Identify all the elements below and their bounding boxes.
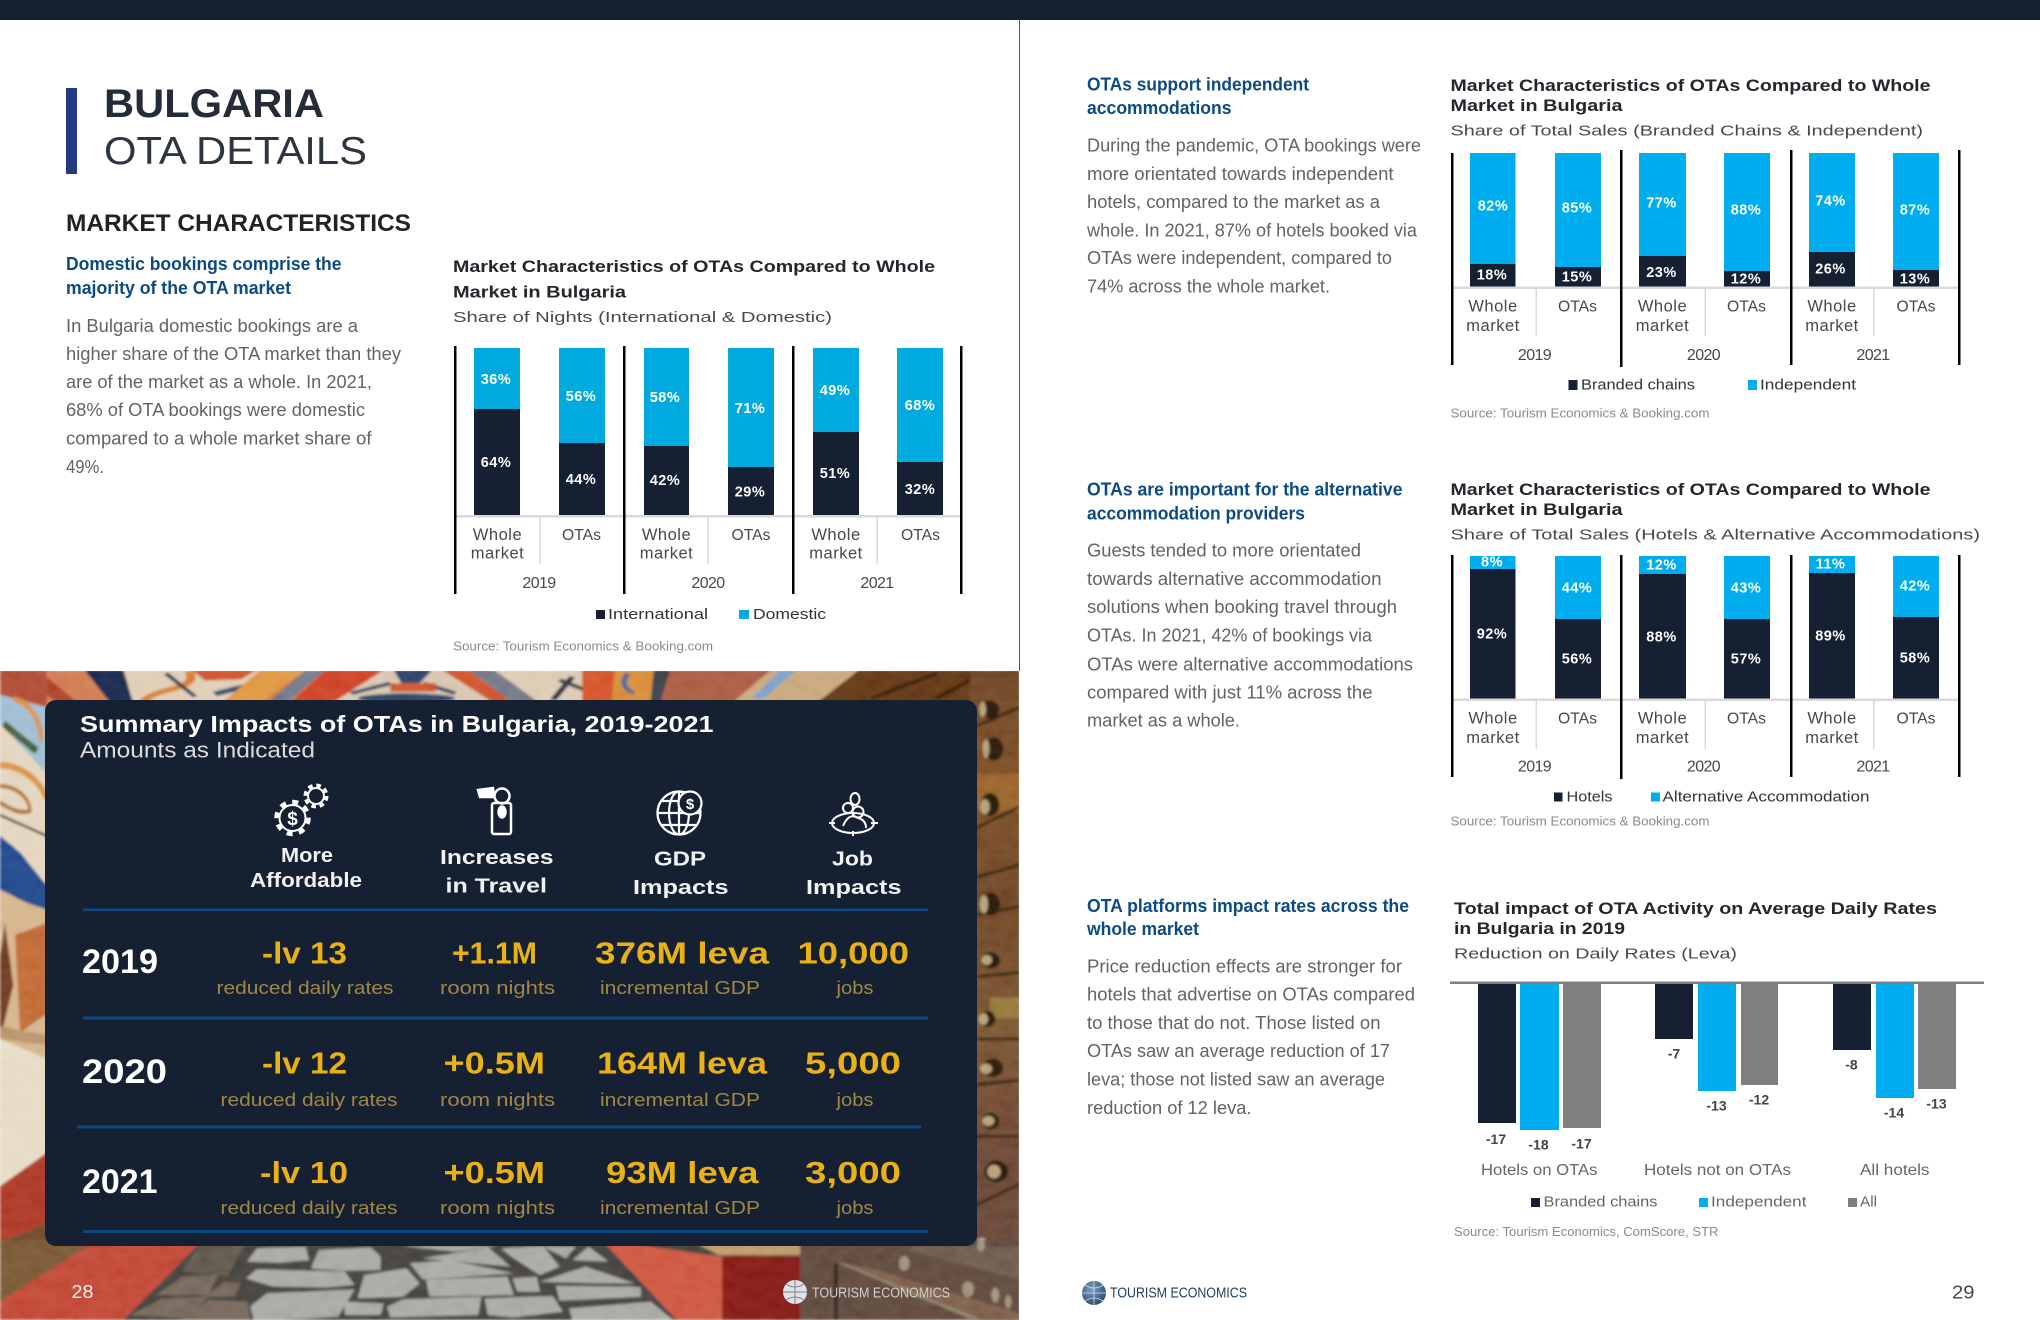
row 2019: reduced daily rates — [216, 978, 394, 998]
value labels: 42% — [650, 473, 680, 489]
row 2021: reduced daily rates — [220, 1198, 398, 1218]
category labels: market — [809, 544, 863, 562]
category labels: 2021 — [1856, 347, 1890, 364]
panel heading — [80, 711, 714, 762]
text block: alternative accommodation: OTAs are important for the alternative — [1087, 480, 1402, 500]
fresco left strip — [0, 670, 47, 1320]
category labels: Whole — [1807, 710, 1857, 728]
value labels: -12 — [1749, 1092, 1769, 1108]
row 2020: room nights — [440, 1090, 555, 1110]
row 2020: +0.5M — [444, 1046, 545, 1080]
panel heading: Summary Impacts of OTAs in Bulgaria, 2019-2021 — [80, 711, 714, 737]
column headings: Job — [832, 848, 873, 870]
chart heading: Market in Bulgaria — [1450, 500, 1623, 519]
column headings: Impacts — [633, 877, 728, 899]
category labels: 2019 — [1518, 347, 1552, 364]
value labels — [1477, 194, 1930, 288]
title: BULGARIA — [104, 82, 324, 126]
legend: Alternative Accommodation — [1662, 788, 1870, 806]
category labels: Whole — [473, 526, 522, 544]
category labels: market — [471, 544, 524, 562]
source note: Source: Tourism Economics & Booking.com — [1450, 814, 1710, 828]
legend: Hotels — [1566, 788, 1612, 806]
value labels: 23% — [1646, 265, 1677, 281]
category labels: market — [1466, 729, 1520, 747]
value labels: 88% — [1731, 202, 1761, 218]
value labels: 26% — [1815, 262, 1846, 278]
legend — [1568, 376, 1857, 394]
value labels: 36% — [481, 372, 511, 388]
chart heading — [453, 257, 935, 326]
value labels: -17 — [1571, 1136, 1592, 1152]
category labels: OTAs — [1897, 298, 1936, 316]
text block: platforms impact rates: leva; those not listed saw an average — [1087, 1070, 1385, 1090]
category labels: OTAs — [1897, 710, 1936, 728]
category labels: Whole — [1807, 298, 1857, 316]
text block: independent accommodations: more orientated towards independent — [1087, 164, 1394, 184]
icon: globe with coin: $ — [686, 796, 695, 813]
text block: independent accommodations: OTAs support independent — [1087, 74, 1309, 94]
text block: alternative accommodation: towards alternative accommodation — [1087, 569, 1382, 589]
value labels: -14 — [1884, 1104, 1904, 1120]
row 2019: room nights — [440, 978, 555, 998]
chart heading: Market Characteristics of OTAs Compared to Whole — [453, 257, 935, 276]
zero axis — [1450, 982, 1984, 984]
column headings: GDP — [654, 848, 706, 870]
row 2019: 10,000 — [798, 936, 909, 970]
axis and year dividers — [1451, 555, 1960, 779]
value labels: 44% — [566, 472, 596, 488]
value labels — [1486, 1046, 1947, 1152]
value labels: -13 — [1926, 1096, 1947, 1112]
category labels: OTAs — [901, 527, 940, 544]
accent bar — [66, 88, 77, 174]
category labels: 2020 — [1687, 758, 1721, 776]
category labels: All hotels — [1860, 1162, 1930, 1179]
axis and year dividers — [1451, 150, 1960, 367]
text block: domestic bookings: higher share of the OTA market than they — [66, 344, 401, 364]
category labels — [1481, 1162, 1930, 1179]
category labels: market — [1805, 317, 1859, 335]
value labels: 57% — [1731, 652, 1761, 668]
text block: domestic bookings: 68% of OTA bookings were domestic — [66, 400, 365, 420]
row 2020: 5,000 — [805, 1046, 901, 1080]
category labels: market — [1805, 729, 1859, 747]
row 2021: -lv 10 — [260, 1155, 348, 1190]
row 2021: room nights — [440, 1198, 555, 1218]
category labels: market — [1636, 317, 1689, 335]
row 2019 — [82, 936, 909, 998]
section heading: MARKET CHARACTERISTICS — [66, 210, 411, 237]
value labels: 18% — [1477, 268, 1507, 284]
row 2020: -lv 12 — [262, 1046, 347, 1080]
text block: platforms impact rates — [1086, 896, 1415, 1118]
category labels: market — [1466, 317, 1520, 335]
row 2019: +1.1M — [452, 936, 537, 970]
text block: independent accommodations — [1086, 74, 1421, 296]
value labels: -8 — [1845, 1056, 1858, 1072]
chart heading: Market in Bulgaria — [453, 282, 627, 302]
row 2019: incremental GDP — [600, 978, 760, 998]
category labels: 2021 — [860, 575, 894, 592]
category labels: OTAs — [562, 527, 601, 544]
value labels: 58% — [1900, 650, 1930, 666]
row 2020: incremental GDP — [600, 1090, 760, 1110]
page divider — [1019, 20, 1020, 671]
chart heading — [1454, 899, 1937, 962]
value labels: 49% — [820, 383, 850, 399]
text block: platforms impact rates: OTAs saw an average reduction of 17 — [1087, 1041, 1390, 1061]
stacked bars — [1470, 153, 1939, 287]
category labels: 2021 — [1856, 758, 1890, 776]
row 2020: 2020 — [82, 1053, 167, 1091]
source note: Source: Tourism Economics, ComScore, STR — [1454, 1225, 1718, 1239]
icon: globe with coin — [658, 791, 702, 835]
legend — [596, 606, 827, 623]
category labels: 2020 — [691, 575, 725, 592]
value labels: 77% — [1646, 196, 1677, 212]
icon: gears with dollar — [276, 786, 326, 834]
text block: domestic bookings: compared to a whole market share of — [66, 428, 373, 448]
title — [104, 82, 367, 173]
legend: Independent — [1760, 376, 1857, 394]
row rules — [77, 908, 928, 1233]
value labels: 29% — [735, 484, 765, 500]
row 2021: 3,000 — [805, 1155, 901, 1190]
category labels: OTAs — [1727, 298, 1766, 316]
value labels: 58% — [650, 390, 680, 406]
category labels — [471, 526, 940, 592]
category labels: Hotels not on OTAs — [1644, 1162, 1791, 1179]
chart heading: in Bulgaria in 2019 — [1454, 919, 1625, 938]
column headings — [250, 845, 902, 899]
row 2019: -lv 13 — [262, 936, 347, 970]
text block: platforms impact rates: hotels that advertise on OTAs compared — [1087, 984, 1415, 1004]
icon: gears with dollar: $ — [287, 809, 298, 830]
floor, red walls and door — [0, 1239, 1020, 1320]
text block: independent accommodations: 74% across the whole market. — [1087, 276, 1330, 296]
chart heading — [1450, 480, 1980, 544]
legend: Domestic — [753, 606, 827, 623]
text block: independent accommodations: OTAs were independent, compared to — [1087, 248, 1392, 268]
text block: domestic bookings: In Bulgaria domestic bookings are a — [66, 316, 359, 336]
value labels: 82% — [1478, 198, 1508, 214]
legend: Branded chains — [1581, 376, 1695, 394]
text block: domestic bookings: majority of the OTA market — [66, 278, 291, 298]
category labels: Whole — [1638, 298, 1687, 316]
text block: domestic bookings — [66, 254, 401, 477]
value labels: 56% — [566, 389, 596, 405]
category labels: OTAs — [1558, 298, 1597, 316]
bars — [1478, 983, 1956, 1130]
column headings: More — [281, 845, 333, 867]
row 2021: jobs — [835, 1198, 874, 1218]
value labels: 85% — [1562, 200, 1592, 216]
value labels: -13 — [1706, 1098, 1727, 1114]
value labels: 71% — [735, 401, 765, 417]
value labels: 8% — [1481, 554, 1503, 570]
row 2021: 2021 — [82, 1163, 158, 1201]
value labels: 51% — [820, 466, 850, 482]
value labels: 12% — [1731, 272, 1761, 288]
chart: share of nights — [453, 257, 962, 654]
chart heading: Market Characteristics of OTAs Compared to Whole — [1450, 76, 1930, 95]
row 2019: 376M leva — [595, 936, 770, 970]
row 2020: jobs — [835, 1090, 874, 1110]
text block: independent accommodations: During the pandemic, OTA bookings were — [1087, 136, 1421, 156]
category labels: 2019 — [1518, 758, 1552, 776]
panel: summary impacts — [45, 700, 977, 1246]
chart: reduction on daily rates — [1450, 899, 1984, 1239]
text block: alternative accommodation: accommodation providers — [1087, 504, 1305, 524]
fresco ceiling strip — [45, 671, 972, 707]
text block: independent accommodations: whole. In 2021, 87% of hotels booked via — [1086, 220, 1418, 240]
category labels: OTAs — [1727, 710, 1766, 728]
chart heading: Share of Nights (International & Domestic) — [453, 309, 832, 326]
value labels: 32% — [905, 482, 935, 498]
category labels: OTAs — [732, 527, 771, 544]
text block: platforms impact rates: whole market — [1086, 919, 1199, 939]
text block: domestic bookings: Domestic bookings comprise the — [66, 254, 342, 274]
category labels: 2020 — [1687, 347, 1721, 364]
text block: alternative accommodation: solutions when booking travel through — [1087, 597, 1397, 617]
source note: Source: Tourism Economics & Booking.com — [453, 640, 713, 654]
value labels — [1477, 554, 1930, 668]
category labels: Hotels on OTAs — [1481, 1162, 1598, 1179]
value labels: 88% — [1646, 630, 1677, 646]
chart: branded chains vs independent — [1450, 76, 1960, 420]
row 2020: 164M leva — [597, 1046, 768, 1080]
row 2020: reduced daily rates — [220, 1090, 398, 1110]
category labels: Whole — [1638, 710, 1687, 728]
text block: platforms impact rates: to those that do not. Those listed on — [1087, 1013, 1380, 1033]
column headings: in Travel — [446, 876, 547, 898]
value labels: -18 — [1528, 1136, 1549, 1152]
row 2021 — [82, 1155, 901, 1218]
legend: International — [608, 606, 708, 623]
top header bar — [0, 0, 2040, 20]
text block: independent accommodations: hotels, compared to the market as a — [1087, 192, 1381, 212]
category labels: Whole — [1468, 298, 1518, 316]
row 2021: +0.5M — [444, 1155, 545, 1190]
stacked bars — [474, 348, 943, 515]
text block: alternative accommodation: OTAs were alternative accommodations — [1087, 654, 1413, 674]
panel heading: Amounts as Indicated — [80, 738, 315, 762]
title: OTA DETAILS — [104, 130, 367, 173]
chart heading: Reduction on Daily Rates (Leva) — [1454, 946, 1737, 962]
background photo: monastery fresco and stone floor — [0, 670, 1020, 1320]
category labels: 2019 — [522, 575, 556, 592]
column headings: Affordable — [250, 870, 362, 892]
chart heading: Share of Total Sales (Hotels & Alternative Accommodations) — [1450, 526, 1980, 544]
value labels: 64% — [481, 455, 511, 471]
category labels — [1466, 298, 1936, 364]
value labels: 92% — [1477, 626, 1507, 642]
value labels: 89% — [1815, 628, 1846, 644]
value labels: 15% — [1562, 270, 1592, 286]
value labels: 42% — [1900, 578, 1930, 594]
text block: platforms impact rates: Price reduction effects are stronger for — [1087, 956, 1402, 976]
page number 28: 28 — [72, 1282, 94, 1302]
value labels: 43% — [1731, 580, 1761, 596]
text block: platforms impact rates: OTA platforms impact rates across the — [1087, 896, 1409, 916]
row 2019: 2019 — [82, 943, 158, 981]
value labels: 56% — [1562, 652, 1592, 668]
category labels: OTAs — [1558, 710, 1597, 728]
row 2021: incremental GDP — [600, 1198, 760, 1218]
value labels: 13% — [1900, 272, 1930, 288]
chart heading: Total impact of OTA Activity on Average Daily Rates — [1454, 899, 1937, 918]
source note: Source: Tourism Economics & Booking.com — [1450, 406, 1710, 420]
value labels: 68% — [905, 398, 935, 414]
category labels — [1466, 710, 1936, 776]
stacked bars — [1470, 556, 1939, 699]
value labels: 87% — [1900, 202, 1930, 218]
value labels: 74% — [1815, 194, 1846, 210]
row 2020 — [82, 1046, 901, 1110]
icon: hand with phone — [478, 788, 511, 834]
column headings: Increases — [440, 847, 554, 869]
logo: tourism economics: TOURISM ECONOMICS — [1110, 1284, 1247, 1302]
page number 29: 29 — [1952, 1282, 1974, 1302]
text block: platforms impact rates: reduction of 12 leva. — [1087, 1098, 1252, 1118]
column headings: Impacts — [806, 877, 902, 899]
category labels: market — [640, 544, 693, 562]
chart heading: Share of Total Sales (Branded Chains & Independent) — [1450, 122, 1923, 140]
legend: Branded chains — [1544, 1194, 1658, 1210]
axis and year dividers — [454, 346, 962, 594]
chart heading: Market Characteristics of OTAs Compared to Whole — [1450, 480, 1930, 499]
legend: Independent — [1711, 1194, 1807, 1210]
category labels: Whole — [811, 526, 861, 544]
text block: domestic bookings: are of the market as a whole. In 2021, — [66, 372, 372, 392]
category labels: Whole — [1468, 710, 1518, 728]
text block: alternative accommodation: OTAs. In 2021, 42% of bookings via — [1087, 626, 1373, 646]
logo: tourism economics light: TOURISM ECONOMICS — [812, 1284, 950, 1302]
chart heading — [1450, 76, 1930, 140]
legend: All — [1860, 1194, 1877, 1210]
category labels: Whole — [642, 526, 691, 544]
category labels: market — [1636, 729, 1689, 747]
value labels: -7 — [1668, 1046, 1680, 1062]
text block: alternative accommodation: Guests tended to more orientated — [1087, 540, 1361, 560]
logo: tourism economics — [1082, 1281, 1247, 1305]
value labels: 11% — [1816, 556, 1845, 572]
icon: people on target — [829, 793, 878, 836]
value labels — [481, 372, 935, 500]
text block: independent accommodations: accommodations — [1087, 98, 1232, 118]
value labels: 44% — [1562, 580, 1592, 596]
text block: alternative accommodation — [1087, 480, 1413, 730]
value labels: -17 — [1486, 1131, 1506, 1147]
legend — [1531, 1194, 1877, 1210]
chart heading: Market in Bulgaria — [1450, 96, 1623, 115]
legend — [1554, 788, 1870, 806]
text block: alternative accommodation: market as a whole. — [1087, 710, 1240, 730]
row 2019: jobs — [835, 978, 874, 998]
value labels: 12% — [1646, 558, 1677, 574]
logo: tourism economics light — [783, 1280, 950, 1304]
chart: hotels vs alternative accommodation — [1450, 480, 1980, 828]
text block: alternative accommodation: compared with just 11% across the — [1087, 682, 1372, 702]
row 2021: 93M leva — [606, 1155, 759, 1190]
door right strip — [966, 670, 1020, 1320]
text block: domestic bookings: 49%. — [66, 457, 104, 477]
